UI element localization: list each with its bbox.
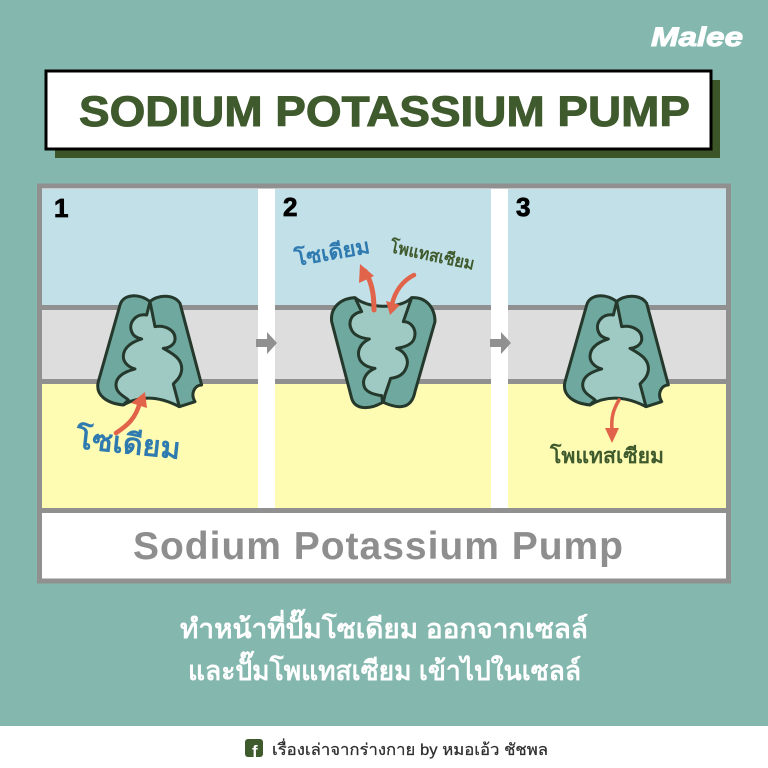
footer bar: [0, 726, 768, 768]
lower frame line: [42, 508, 726, 513]
icon: facebook: [245, 739, 263, 761]
arrow: potassium in: [386, 275, 414, 315]
description text: [180, 609, 588, 686]
pump protein, open toward cell: [98, 296, 202, 407]
panel 1: sodium enters: [42, 189, 258, 508]
arrow: sodium out: [359, 264, 374, 310]
icon: facebook: f: [252, 742, 258, 761]
number 1: 1: [54, 193, 68, 223]
diagram frame: [40, 186, 728, 581]
pump protein, open to outside: [332, 298, 435, 408]
caption: Sodium Potassium Pump: Sodium Potassium Pump: [133, 525, 623, 568]
title text: SODIUM POTASSIUM PUMP: [79, 88, 690, 136]
arrow: step 1 to 2: [256, 332, 277, 354]
pump protein, open toward cell: [564, 296, 668, 407]
panel 2: exchange at outside: [275, 189, 491, 508]
number 3: 3: [516, 192, 530, 222]
label: potassium: โพแทสเซียม: [549, 443, 664, 468]
description text: ทำหน้าที่ปั๊มโซเดียม ออกจากเซลล์: [180, 609, 588, 644]
panel 3: potassium released: [508, 189, 726, 508]
arrow: potassium out: [605, 400, 619, 443]
logo: Malee: Malee: [651, 22, 743, 52]
label: potassium: โพแทสเซียม: [387, 236, 476, 274]
white divider strips: [258, 189, 508, 509]
title banner: [46, 71, 720, 158]
arrow: step 2 to 3: [490, 332, 511, 354]
number 2: 2: [283, 192, 297, 222]
label: sodium: โซเดียม: [291, 233, 372, 271]
credit text: เรื่องเล่าจากร่างกาย by หมอเอ้ว ชัชพล: [272, 738, 548, 759]
arrow: sodium in: [116, 392, 147, 433]
label: sodium: โซเดียม: [73, 420, 182, 466]
description text: และปั๊มโพแทสเซียม เข้าไปในเซลล์: [188, 651, 581, 686]
